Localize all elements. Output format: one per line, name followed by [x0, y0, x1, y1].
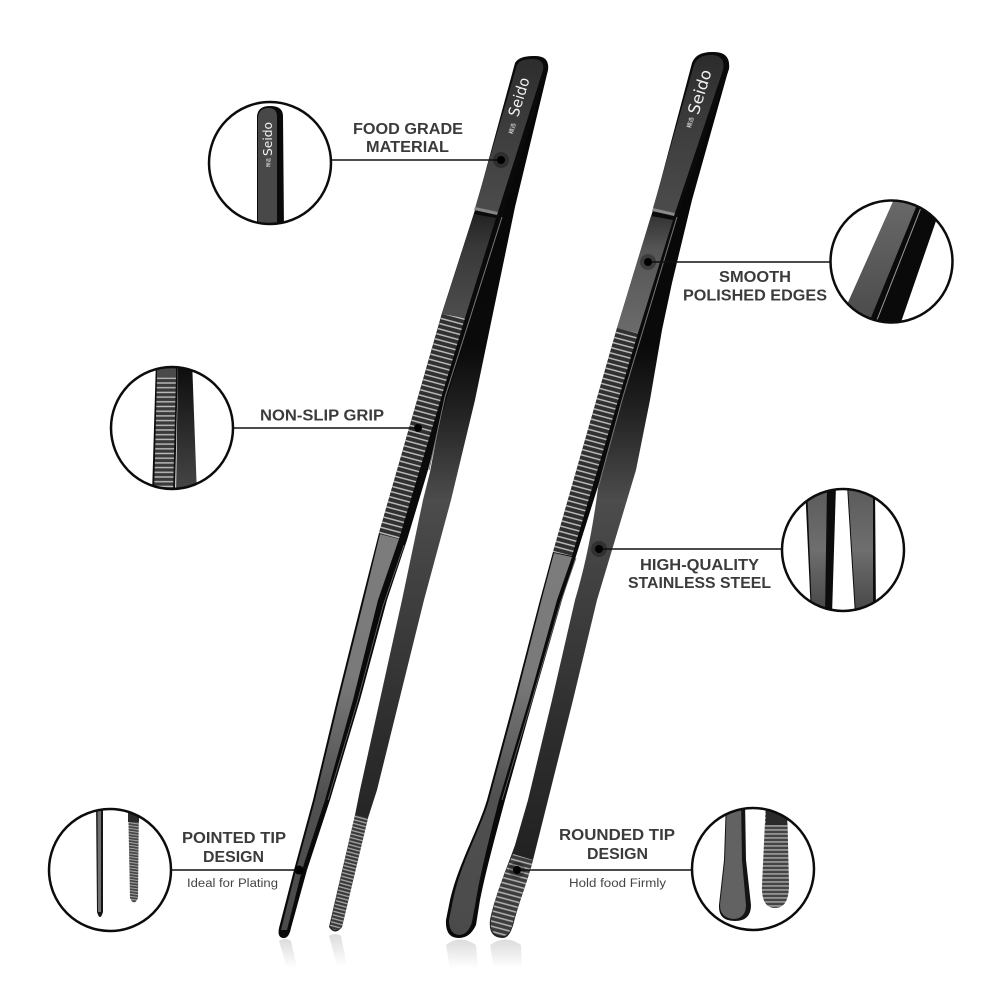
- right rounded tweezers: [446, 52, 729, 938]
- leader line and dot: [233, 424, 422, 432]
- callout: high-quality stainless steel: [591, 485, 904, 615]
- heading: rounded tip design: DESIGN: [587, 846, 648, 863]
- callout: pointed tip design: [49, 800, 304, 931]
- heading: pointed tip design: [182, 830, 286, 866]
- back arm: [490, 68, 729, 938]
- logo: Seido on right tweezers: 精选: [685, 116, 696, 129]
- back arm: [329, 70, 548, 932]
- front arm: [279, 56, 548, 938]
- inset circle: polished edge: [830, 195, 952, 325]
- callout: non-slip grip: [111, 360, 422, 495]
- heading: high-quality stainless steel: [628, 557, 771, 592]
- front arm: [446, 52, 729, 938]
- leader line and dot: [509, 862, 691, 878]
- inset circle: tweezer head: [209, 102, 331, 230]
- heading: smooth polished edges: [683, 269, 827, 304]
- callout: rounded tip design: [509, 800, 814, 930]
- heading: pointed tip design: DESIGN: [203, 849, 264, 866]
- left pointed tweezers: [279, 56, 548, 938]
- callout: smooth polished edges: [640, 195, 952, 325]
- leader line and dot: [332, 152, 509, 168]
- heading: rounded tip design: ROUNDED TIP: [559, 827, 675, 844]
- logo: Seido on left tweezers: Seido: [505, 75, 534, 119]
- subtext: hold food firmly: Hold food Firmly: [569, 878, 666, 890]
- heading: smooth polished edges: SMOOTH: [719, 269, 791, 286]
- callout: food grade material: [209, 102, 509, 230]
- heading: food grade material: MATERIAL: [366, 139, 449, 156]
- heading: non-slip grip: NON-SLIP GRIP: [260, 408, 384, 424]
- heading: high-quality stainless steel: HIGH-QUALITY: [640, 557, 760, 574]
- leader line and dot: [640, 254, 830, 270]
- heading: high-quality stainless steel: STAINLESS STEEL: [628, 575, 771, 592]
- logo: Seido on left tweezers: 精选: [507, 122, 518, 135]
- inset circle: tweezer head: Seido: [261, 122, 275, 156]
- logo: Seido on right tweezers: Seido: [684, 67, 716, 117]
- reflections under tips: [279, 934, 522, 968]
- heading: pointed tip design: POINTED TIP: [182, 830, 286, 847]
- inset circle: tweezer head: 精选: [265, 158, 272, 167]
- subtext: ideal for plating: Ideal for Plating: [187, 878, 278, 890]
- leader line and dot: [172, 866, 304, 874]
- heading: rounded tip design: [559, 827, 675, 863]
- inset circle: rounded tips: [692, 800, 814, 930]
- inset circle: pointed tips: [49, 800, 171, 931]
- heading: food grade material: FOOD GRADE: [353, 121, 463, 138]
- leader line and dot: [591, 541, 782, 557]
- heading: food grade material: [353, 121, 463, 156]
- inset circle: ribbed grip: [111, 360, 233, 495]
- inset circle: two arms: [782, 485, 904, 615]
- heading: smooth polished edges: POLISHED EDGES: [683, 288, 827, 304]
